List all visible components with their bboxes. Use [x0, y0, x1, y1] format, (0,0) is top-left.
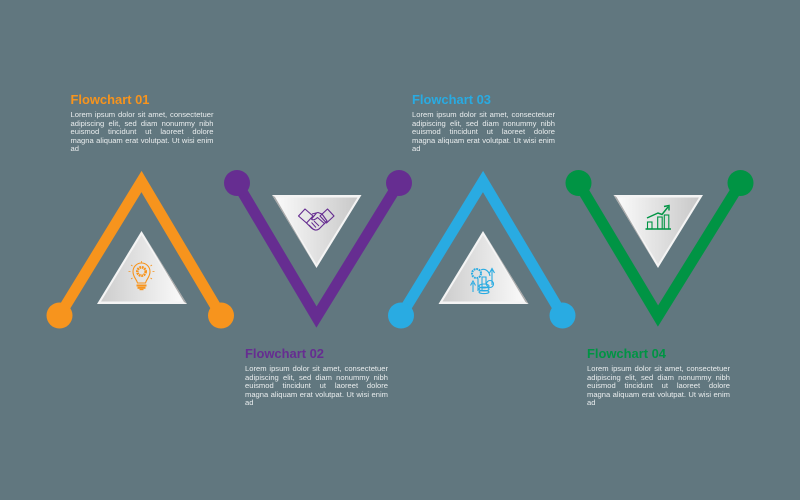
icon: growth bar chart: [646, 206, 671, 229]
text block: flowchart 03 description: euismod tincidunt ut laoreet dolore: [412, 127, 555, 136]
text block: flowchart 02 description: magna aliquam erat volutpat. Ut wisi enim: [245, 390, 388, 399]
text block: flowchart 01 description: adipiscing elit, sed diam nonummy nibh: [70, 119, 214, 128]
heading: flowchart 03: Flowchart 03: [412, 93, 491, 107]
chevron: purple: [224, 170, 412, 317]
text block: flowchart 03 description: [412, 110, 555, 153]
text block: flowchart 03 description: ad: [412, 144, 420, 153]
text block: flowchart 04 description: euismod tincidunt ut laoreet dolore: [587, 381, 730, 390]
heading: flowchart 02: Flowchart 02: [245, 347, 324, 361]
text block: flowchart 02 description: [245, 364, 388, 407]
text block: flowchart 01 description: euismod tincidunt ut laoreet dolore: [70, 127, 214, 136]
text block: flowchart 02 description: Lorem ipsum dolor sit amet, consectetuer: [245, 364, 388, 373]
text block: flowchart 02 description: euismod tincidunt ut laoreet dolore: [245, 381, 388, 390]
triangle card: orange: [97, 231, 187, 304]
triangle card: blue: [438, 231, 528, 304]
text block: flowchart 04 description: [587, 364, 730, 407]
chevron: orange: [46, 182, 234, 328]
text block: flowchart 04 description: Lorem ipsum dolor sit amet, consectetuer: [587, 364, 730, 373]
icon: coins, gear and growth arrows: [470, 268, 494, 294]
chevron: green: [566, 170, 754, 316]
icon: light bulb with gear: [128, 261, 154, 290]
text block: flowchart 04 description: magna aliquam erat volutpat. Ut wisi enim: [587, 390, 730, 399]
icon: handshake: [298, 209, 334, 230]
text block: flowchart 01 description: [70, 110, 214, 153]
triangle card: green: [614, 195, 703, 268]
text block: flowchart 03 description: magna aliquam erat volutpat. Ut wisi enim: [412, 136, 555, 145]
heading: flowchart 04: Flowchart 04: [587, 347, 666, 361]
text block: flowchart 01 description: Lorem ipsum dolor sit amet, consectetuer: [70, 110, 214, 119]
text block: flowchart 03 description: adipiscing elit, sed diam nonummy nibh: [412, 119, 555, 128]
text block: flowchart 01 description: magna aliquam erat volutpat. Ut wisi enim: [70, 136, 214, 145]
text block: flowchart 02 description: ad: [245, 398, 253, 407]
text block: flowchart 04 description: ad: [587, 398, 595, 407]
triangle card: purple: [272, 195, 362, 268]
text block: flowchart 03 description: Lorem ipsum dolor sit amet, consectetuer: [412, 110, 555, 119]
heading: flowchart 01: Flowchart 01: [70, 93, 150, 107]
text block: flowchart 02 description: adipiscing elit, sed diam nonummy nibh: [245, 373, 388, 382]
chevron: blue: [388, 182, 576, 328]
text block: flowchart 04 description: adipiscing elit, sed diam nonummy nibh: [587, 373, 730, 382]
text block: flowchart 01 description: ad: [70, 144, 79, 153]
